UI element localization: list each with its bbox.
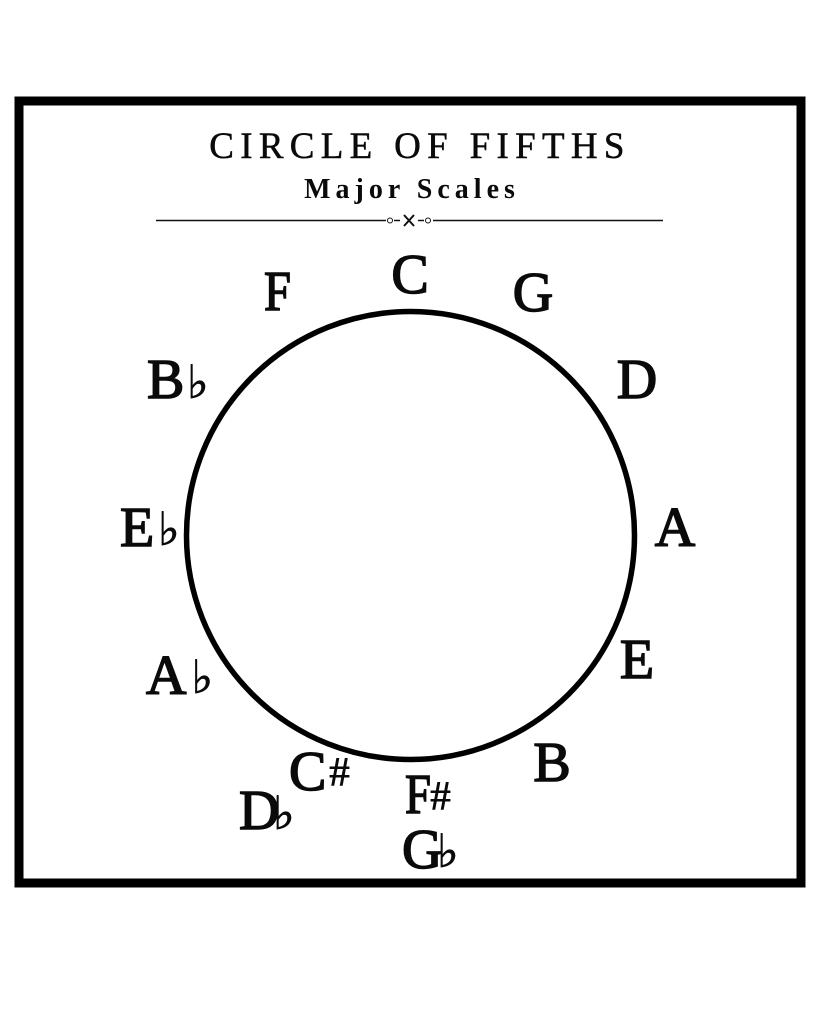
title: CIRCLE OF FIFTHS [209, 126, 631, 167]
note C: C [391, 244, 429, 306]
outer frame [19, 101, 801, 883]
note G flat: G [402, 819, 442, 881]
note C sharp: C [289, 741, 326, 803]
note D flat: D [239, 780, 279, 842]
note F sharp: F [405, 764, 431, 826]
note E flat: E [120, 497, 154, 559]
note B flat [147, 349, 209, 411]
note D flat: ♭ [273, 786, 295, 840]
note A flat [146, 645, 213, 707]
note B: B [533, 732, 571, 794]
note G: G [513, 262, 553, 324]
note C sharp: # [329, 750, 350, 796]
note labels [120, 244, 696, 881]
note A flat: A [146, 645, 187, 707]
note E flat: ♭ [158, 502, 180, 556]
note B flat: ♭ [187, 355, 209, 409]
note G flat: ♭ [437, 824, 459, 878]
subtitle: Major Scales [304, 174, 520, 205]
note A: A [655, 497, 696, 559]
note E flat [120, 497, 180, 559]
note F sharp: # [430, 774, 451, 820]
note F sharp [405, 764, 451, 826]
note E: E [620, 629, 654, 691]
ornamental divider [156, 215, 663, 226]
note B flat: B [147, 349, 184, 411]
circle [186, 312, 634, 760]
note F: F [264, 261, 291, 323]
note D: D [617, 349, 657, 411]
note C sharp [289, 741, 350, 803]
note A flat: ♭ [192, 650, 213, 704]
